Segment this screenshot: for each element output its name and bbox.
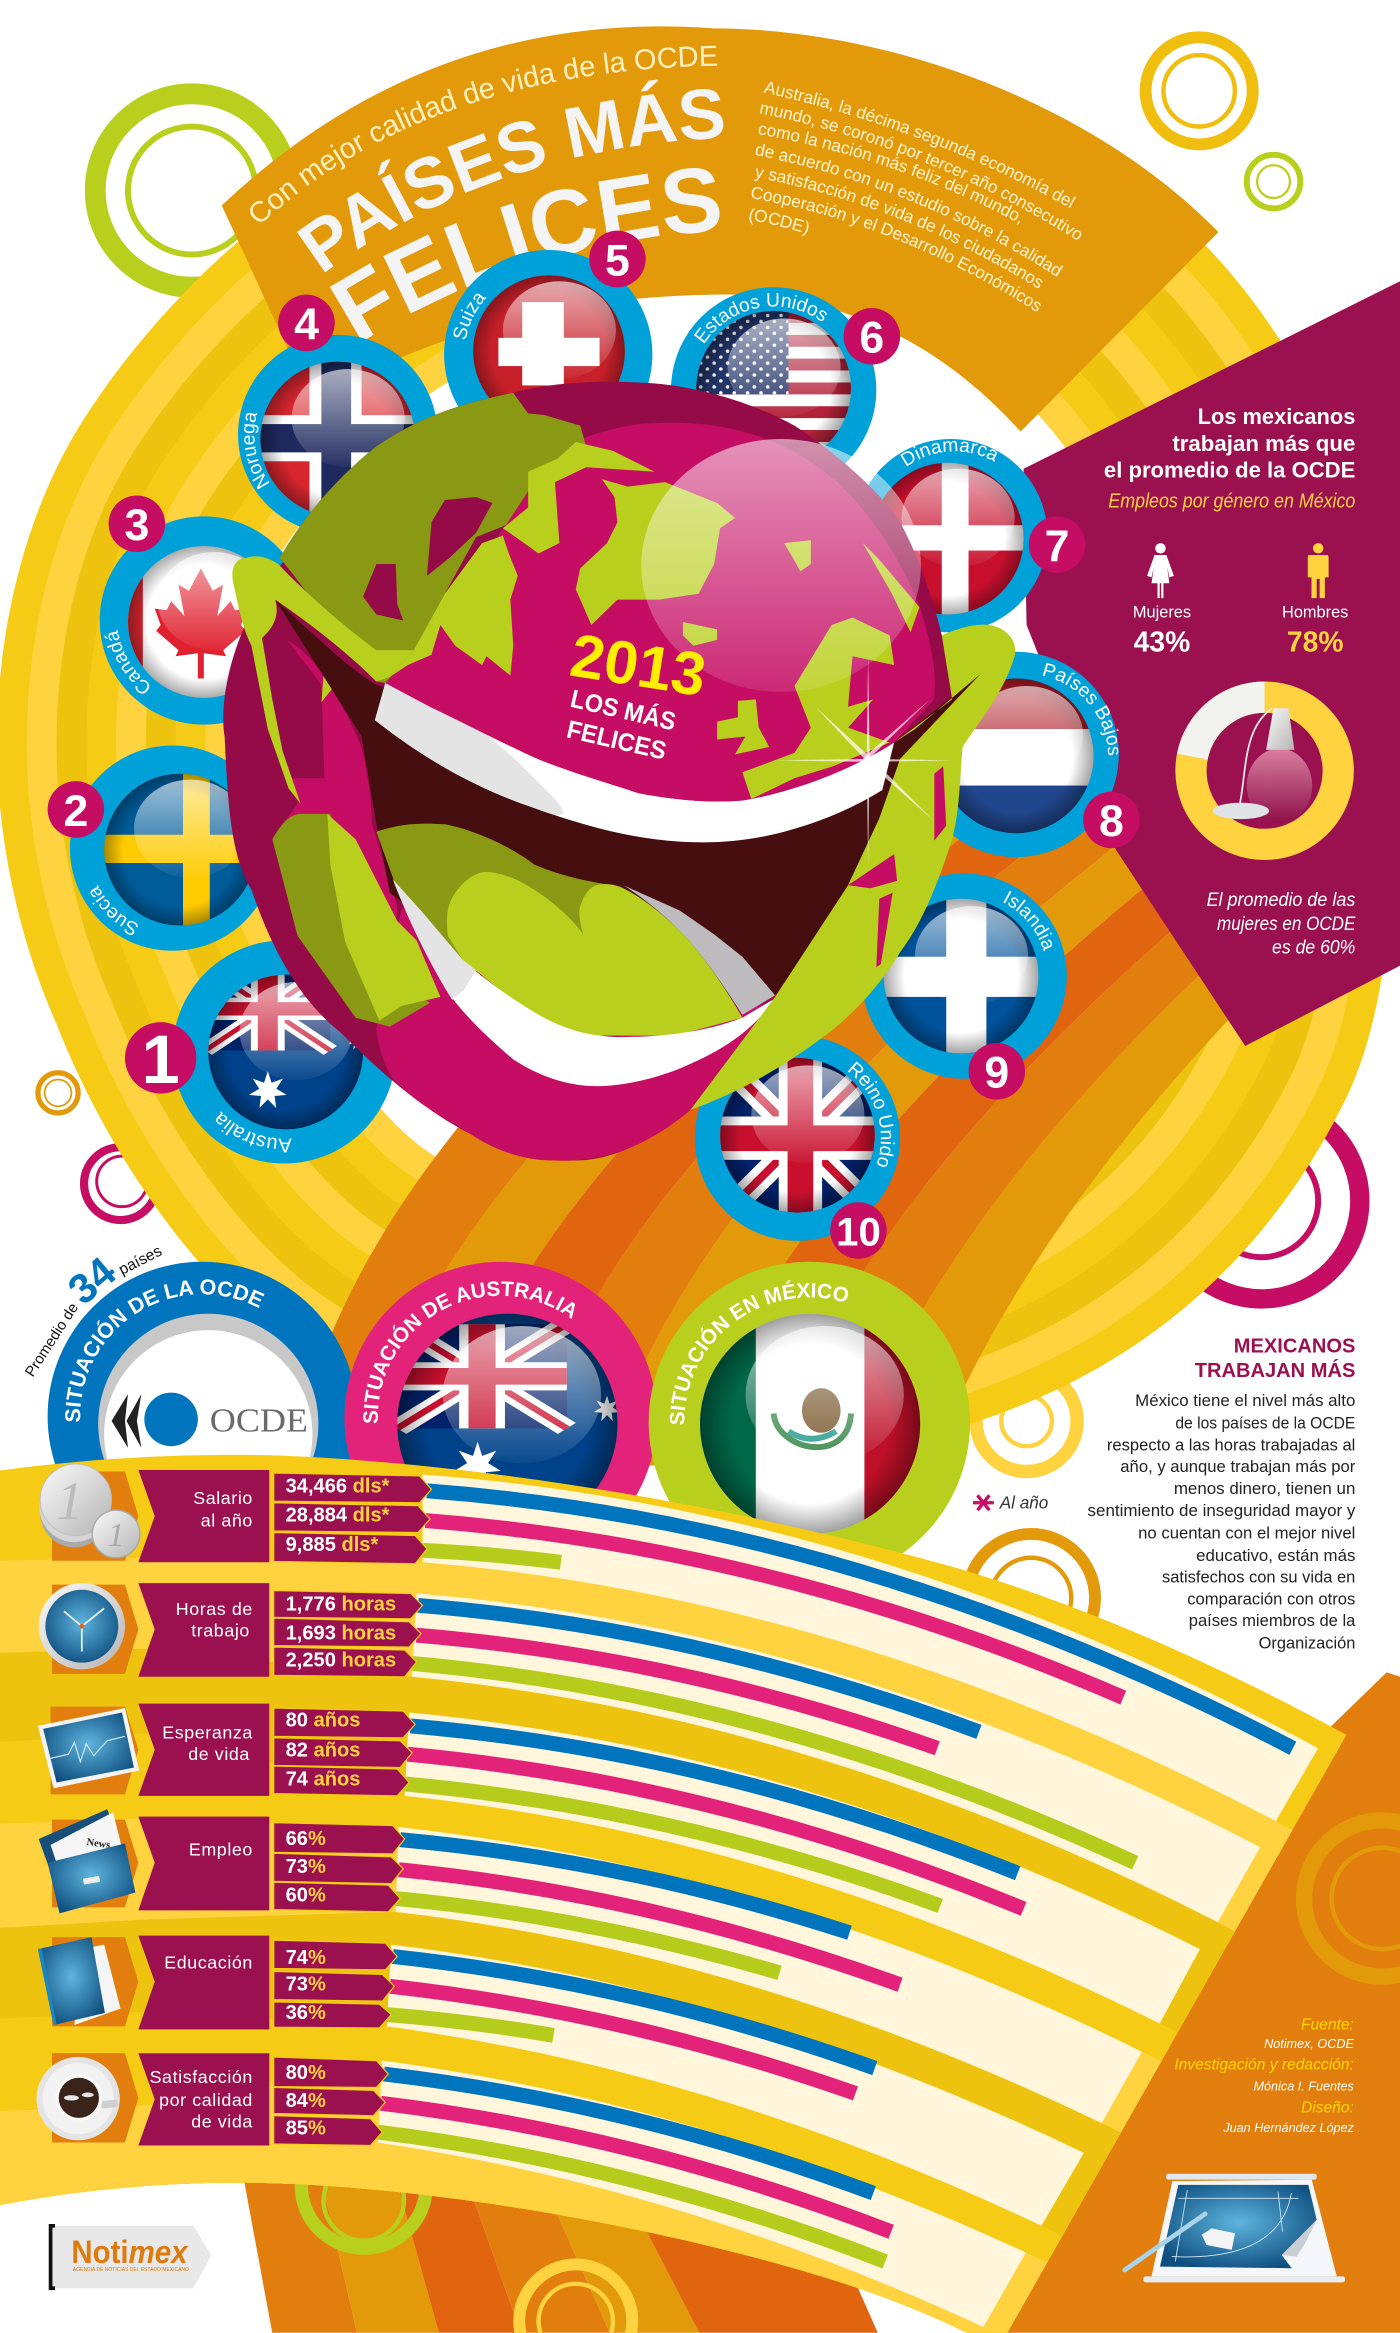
table background bands bbox=[0, 1443, 1400, 2333]
data table bbox=[0, 1443, 1400, 2333]
men figure: Hombres bbox=[1282, 604, 1348, 622]
orange rainbow stripes bbox=[283, 655, 1279, 1466]
Notimex logo bbox=[51, 2226, 211, 2288]
icon: folder bbox=[39, 1809, 135, 1913]
text block: mexicanos trabajan más: respecto a las horas trabajadas al bbox=[1107, 1437, 1355, 1455]
row: esperanza de vida: Esperanza bbox=[162, 1723, 253, 1743]
flag 7: Dinamarca: 7 bbox=[1045, 522, 1069, 571]
intro paragraph: y satisfacción de vida de los ciudadanos bbox=[754, 168, 1042, 288]
row: esperanza de vida: 74 años bbox=[286, 1768, 360, 1790]
row: salario: Salario bbox=[193, 1488, 253, 1508]
lower teeth bbox=[445, 960, 775, 1086]
intro paragraph: de acuerdo con un estudio sobre la calidad bbox=[756, 144, 1064, 277]
row: educación: Educación bbox=[164, 1952, 253, 1972]
flag 1: Australia: 1 bbox=[142, 1021, 180, 1098]
panel note: es de 60% bbox=[1272, 937, 1355, 959]
icon: woman bbox=[1147, 543, 1174, 598]
left cheek bbox=[268, 640, 397, 1027]
icon: blueprint bbox=[1125, 2174, 1345, 2282]
tongue back bbox=[376, 824, 742, 1036]
title line 2: FELICES bbox=[330, 168, 720, 339]
text block: mexicanos trabajan más: comparación con otros bbox=[1187, 1591, 1355, 1609]
island: britain bbox=[717, 699, 769, 754]
upper teeth shade bbox=[375, 683, 563, 815]
icon: coins: 1 bbox=[107, 1517, 125, 1554]
row: horas: 1,776 horas bbox=[286, 1594, 396, 1616]
text block: mexicanos trabajan más: TRABAJAN MÁS bbox=[1195, 1359, 1355, 1382]
row: horas: 2,250 horas bbox=[286, 1649, 396, 1671]
smiling globe bbox=[223, 382, 1015, 1161]
al año note: Al año bbox=[999, 1494, 1048, 1513]
women figure: 43% bbox=[1134, 626, 1190, 658]
intro paragraph: Cooperación y el Desarrollo Económicos bbox=[752, 187, 1041, 312]
panel heading: el promedio de la OCDE bbox=[1104, 458, 1355, 483]
row: empleo bbox=[52, 1817, 1142, 2123]
row: empleo: 66% bbox=[286, 1828, 326, 1850]
dome olive side bbox=[280, 393, 555, 683]
icon: coffee bbox=[36, 2057, 120, 2140]
year: 2013 bbox=[566, 621, 711, 709]
panel note: mujeres en OCDE bbox=[1217, 913, 1356, 935]
Notimex logo: Notimex bbox=[71, 2233, 189, 2270]
right lip patches bbox=[848, 766, 946, 967]
flag 6: Estados Unidos: Estados Unidos bbox=[694, 293, 827, 344]
globe highlight bbox=[641, 439, 921, 692]
icon: man bbox=[1308, 543, 1329, 598]
flag 7: Dinamarca bbox=[868, 439, 1086, 632]
panel heading: trabajan más que bbox=[1172, 431, 1355, 456]
al año note bbox=[973, 1494, 1048, 1513]
credits bbox=[1174, 2016, 1355, 2135]
credits: Investigación y redacción: bbox=[1174, 2057, 1354, 2074]
row: empleo: 60% bbox=[286, 1884, 326, 1906]
row: satisfacción: Satisfacción bbox=[150, 2067, 253, 2087]
credits: Juan Hernández López bbox=[1222, 2121, 1355, 2135]
arctic islands bbox=[482, 411, 586, 479]
lower teeth left bbox=[393, 879, 476, 1000]
women figure: Mujeres bbox=[1133, 604, 1191, 622]
flag 10: Reino Unido: 10 bbox=[836, 1209, 881, 1254]
intro paragraph bbox=[750, 82, 1082, 312]
dome pink front bbox=[385, 423, 935, 801]
row: esperanza de vida bbox=[51, 1704, 1200, 2023]
credits: Diseño: bbox=[1301, 2100, 1354, 2117]
text block: mexicanos trabajan más: menos dinero, tienen un bbox=[1174, 1480, 1355, 1498]
row: satisfacción bbox=[52, 2053, 1026, 2327]
credits: Fuente: bbox=[1301, 2016, 1354, 2033]
flag 4: Noruega: Noruega bbox=[244, 412, 270, 490]
flag 8: Países Bajos: 8 bbox=[1099, 797, 1124, 846]
panel note: El promedio de las bbox=[1207, 889, 1356, 911]
flag 3: Canadá: 3 bbox=[124, 501, 149, 550]
Mexico ring label: SITUACIÓN EN MÉXICO bbox=[670, 1280, 848, 1425]
globe body shadow bbox=[223, 562, 955, 1161]
row: esperanza de vida: 82 años bbox=[286, 1739, 360, 1761]
flag 2: Suecia bbox=[48, 746, 258, 951]
row: salario: 28,884 dls* bbox=[286, 1504, 390, 1526]
OCDE ring label: SITUACIÓN DE LA OCDE bbox=[65, 1279, 264, 1422]
text block: mexicanos trabajan más: MEXICANOS bbox=[1234, 1335, 1355, 1357]
promedio de 34 países: 34 bbox=[59, 1247, 125, 1313]
row: educación: 36% bbox=[286, 2002, 326, 2024]
text block: mexicanos trabajan más: satisfechos con su vida en bbox=[1162, 1568, 1355, 1586]
flag 5: Suiza bbox=[444, 230, 652, 406]
flag 2: Suecia: Suecia bbox=[90, 885, 138, 935]
panel: Mexicans work more bbox=[1024, 281, 1400, 1046]
globe tagline bbox=[564, 684, 679, 766]
flag 9: Islandia: Islandia bbox=[1004, 890, 1052, 952]
row: satisfacción: 84% bbox=[286, 2090, 326, 2112]
row: salario: 9,885 dls* bbox=[286, 1534, 378, 1556]
right lip bbox=[690, 625, 1015, 1110]
flag 10: Reino Unido: Reino Unido bbox=[848, 1062, 895, 1167]
upper teeth bbox=[375, 683, 894, 842]
Mexico circle bbox=[648, 1262, 970, 1554]
globe tagline: LOS MÁS bbox=[568, 684, 679, 736]
icon: coins: 1 bbox=[57, 1471, 83, 1531]
title line 1: PAÍSES MÁS bbox=[297, 80, 724, 272]
left continent shade bbox=[272, 814, 430, 1027]
cheek dark lake bbox=[266, 640, 324, 778]
credits: Mónica I. Fuentes bbox=[1254, 2079, 1355, 2093]
promedio de 34 países: Promedio de bbox=[23, 1301, 82, 1380]
row: salario: 34,466 dls* bbox=[286, 1475, 390, 1497]
row: satisfacción: de vida bbox=[191, 2112, 253, 2132]
flag 2: Suecia: 2 bbox=[63, 787, 88, 836]
credits: Notimex, OCDE bbox=[1264, 2037, 1354, 2051]
promedio de 34 países: países bbox=[116, 1243, 165, 1279]
donut chart with lamp bbox=[1191, 697, 1338, 844]
continent: north america bbox=[390, 536, 518, 677]
panel note bbox=[1207, 889, 1356, 959]
flag 6: Estados Unidos: 6 bbox=[859, 314, 884, 363]
flag 8: Países Bajos bbox=[953, 652, 1140, 857]
flag 5: Suiza: Suiza bbox=[454, 294, 486, 340]
row: horas bbox=[52, 1583, 1260, 1922]
row: empleo: 73% bbox=[286, 1856, 326, 1878]
mexican eagle bbox=[774, 1388, 851, 1447]
mouth interior bbox=[275, 600, 980, 1012]
intro paragraph: (OCDE) bbox=[750, 208, 808, 236]
sparkle bbox=[774, 655, 952, 864]
text block: mexicanos trabajan más: no cuentan con el mejor nivel bbox=[1138, 1524, 1355, 1542]
text block: mexicanos trabajan más: México tiene el nivel más alto bbox=[1135, 1392, 1355, 1410]
text block: mexicanos trabajan más: sentimiento de inseguridad mayor y bbox=[1088, 1502, 1356, 1520]
flag 1: Australia: Australia bbox=[216, 1111, 292, 1152]
row: horas: 1,693 horas bbox=[286, 1623, 396, 1645]
text block: mexicanos trabajan más: Organización bbox=[1259, 1635, 1355, 1653]
OCDE circle bbox=[48, 1262, 351, 1464]
row: salario bbox=[52, 1470, 1318, 1821]
flag 4: Noruega bbox=[238, 294, 436, 527]
bottom orange stripes bbox=[244, 2182, 878, 2333]
intro paragraph: Australia, la décima segunda economía del bbox=[763, 82, 1076, 208]
row: empleo: Empleo bbox=[189, 1839, 253, 1859]
continent: greenland bbox=[576, 479, 735, 625]
panel heading bbox=[1104, 404, 1355, 483]
left continent bright bbox=[327, 814, 440, 1021]
flag 10: Reino Unido bbox=[694, 1038, 900, 1259]
decorative rings behind the rainbow bbox=[38, 37, 1360, 1662]
row: salario: al año bbox=[201, 1511, 253, 1531]
panel subheading: Empleos por género en México bbox=[1108, 490, 1355, 512]
lake two bbox=[363, 564, 403, 620]
flag 9: Islandia bbox=[864, 873, 1067, 1100]
text block: mexicanos trabajan más: educativo, están más bbox=[1196, 1547, 1355, 1565]
lower teeth shadow bbox=[623, 885, 775, 1015]
globe tagline: FELICES bbox=[564, 716, 669, 766]
row: educación: 73% bbox=[286, 1974, 326, 1996]
row: educación: 74% bbox=[286, 1947, 326, 1969]
yellow rainbow ring bbox=[235, 283, 1156, 1226]
women figure bbox=[1133, 604, 1191, 658]
chin bbox=[376, 908, 781, 1161]
tongue bbox=[447, 872, 742, 1036]
Australia circle bbox=[344, 1262, 654, 1496]
flag 1: Australia bbox=[125, 941, 392, 1164]
Notimex logo: AGENCIA DE NOTICIAS DEL ESTADO MEXICANO bbox=[73, 2267, 189, 2273]
flag 6: Estados Unidos bbox=[671, 287, 900, 464]
flag 5: Suiza: 5 bbox=[605, 236, 630, 285]
row: satisfacción: por calidad bbox=[159, 2090, 253, 2110]
flag 7: Dinamarca: Dinamarca bbox=[900, 440, 997, 466]
lake bbox=[427, 497, 492, 576]
text block: mexicanos trabajan más: países miembros de la bbox=[1189, 1612, 1356, 1630]
icon: book bbox=[38, 1937, 121, 2025]
row: horas: Horas de bbox=[176, 1599, 253, 1619]
row: satisfacción: 80% bbox=[286, 2062, 326, 2084]
kicker: Con mejor calidad de vida de la OCDE bbox=[250, 46, 718, 222]
banner with title bbox=[222, 26, 1218, 432]
icon: folder: News bbox=[86, 1837, 111, 1851]
row: esperanza de vida: de vida bbox=[188, 1744, 250, 1764]
bottom right orange panel bbox=[989, 1672, 1400, 2333]
intro paragraph: mundo, se coronó por tercer año consecutivo bbox=[760, 104, 1082, 240]
men figure: 78% bbox=[1287, 626, 1343, 658]
row: horas: trabajo bbox=[191, 1621, 250, 1641]
OCDE logo bbox=[112, 1393, 308, 1448]
continent: europe bbox=[742, 618, 894, 799]
left lip bbox=[232, 556, 414, 681]
island: svalbard bbox=[784, 540, 811, 571]
flag 4: Noruega: 4 bbox=[294, 300, 319, 349]
panel heading: Los mexicanos bbox=[1198, 404, 1355, 429]
OCDE logo: OCDE bbox=[210, 1402, 308, 1439]
flag 8: Países Bajos: Países Bajos bbox=[1042, 662, 1118, 756]
row: educación bbox=[52, 1936, 1084, 2226]
island: iceland bbox=[683, 622, 717, 646]
text block: mexicanos trabajan más: año, y aunque trabajan más por bbox=[1120, 1458, 1356, 1476]
Australia ring label: SITUACIÓN DE AUSTRALIA bbox=[363, 1281, 575, 1424]
cheek strip bbox=[251, 637, 338, 803]
flag 9: Islandia: 9 bbox=[984, 1049, 1009, 1098]
text block: mexicanos trabajan más bbox=[1088, 1335, 1356, 1653]
dome dark bbox=[280, 382, 952, 801]
icon: clock bbox=[39, 1583, 125, 1669]
continent: arctic bbox=[503, 442, 655, 554]
flag 3: Canadá bbox=[100, 496, 284, 725]
edge strip bbox=[863, 543, 919, 632]
row: esperanza de vida: 80 años bbox=[286, 1710, 360, 1732]
icon: coins bbox=[39, 1464, 140, 1558]
text block: mexicanos trabajan más: de los países de la OCDE bbox=[1175, 1414, 1355, 1432]
row: satisfacción: 85% bbox=[286, 2117, 326, 2139]
intro paragraph: como la nación más feliz del mundo, bbox=[758, 126, 1020, 225]
flag 3: Canadá: Canadá bbox=[104, 630, 150, 694]
men figure bbox=[1282, 604, 1348, 658]
promedio de 34 países bbox=[23, 1243, 165, 1380]
icon: heart monitor bbox=[38, 1708, 139, 1788]
